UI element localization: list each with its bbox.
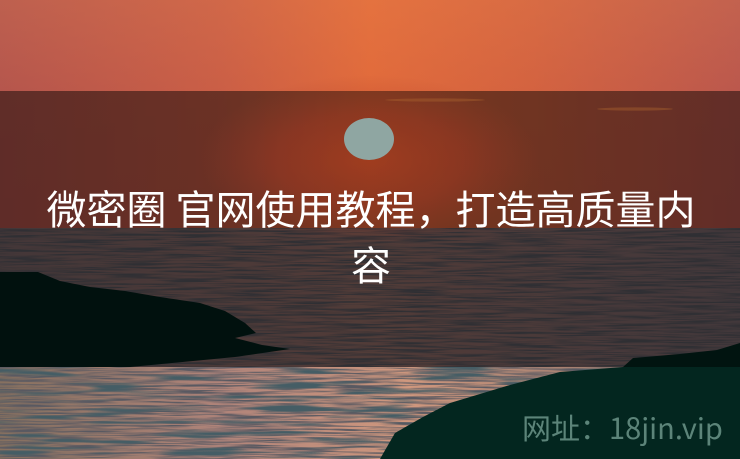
title: 微密圈 官网使用教程，打造高质量内容 <box>47 178 695 292</box>
sun <box>344 118 394 160</box>
right island <box>380 343 740 459</box>
sea <box>0 228 740 459</box>
thin clouds <box>385 98 673 111</box>
sky <box>0 0 740 229</box>
dark overlay band <box>0 91 740 367</box>
left island <box>0 272 290 367</box>
watermark: 网址：18jin.vip <box>522 406 723 448</box>
sun glow <box>199 75 539 245</box>
